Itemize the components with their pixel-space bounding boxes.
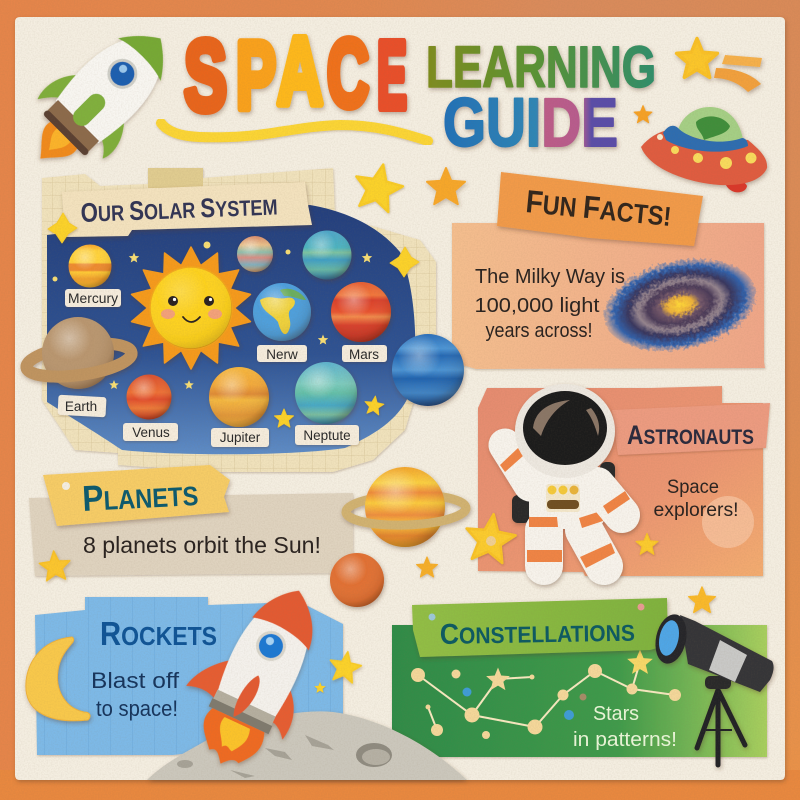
label: Jupiter: [211, 428, 269, 447]
heading: astronauts: ASTRONAUTS: [627, 420, 754, 450]
label: Earth: [58, 395, 106, 417]
planets text: 8 planets orbit the Sun!: [83, 532, 321, 558]
salmon card: [478, 386, 763, 576]
constellations text: [573, 703, 677, 751]
legs: [525, 530, 563, 566]
rockets text: Blast off: [91, 668, 180, 693]
star on astronaut card: [463, 511, 518, 564]
blue felt board: [47, 205, 415, 454]
blue card: [35, 597, 343, 755]
panel: our solar system: [24, 168, 436, 472]
icon: astronaut: [500, 384, 630, 568]
shooting star icon: [677, 38, 762, 92]
heading: our solar system: OUR SOLAR SYSTEM: [80, 190, 278, 228]
astronaut text: Space: [667, 477, 719, 498]
icon: red and white rocket: [163, 564, 344, 784]
label: Mars: [342, 345, 387, 362]
moon surface: [147, 711, 467, 780]
planet: Earth globe: [253, 283, 311, 341]
fact text: The Milky Way is: [475, 266, 625, 288]
icon: green rocket: [8, 6, 193, 191]
label: Nerw: Nerw: [266, 347, 298, 362]
panel: fun facts: [452, 172, 765, 369]
title: Space Learning Guide: E: [377, 22, 407, 129]
small star: [327, 649, 363, 684]
heading: fun facts: FUN FACTS!: [524, 183, 673, 233]
orange tab: [497, 172, 703, 246]
icon: flying saucer: [641, 107, 767, 192]
header banner: [62, 182, 312, 237]
fact text: [474, 266, 625, 342]
title word: SPACE: C: [327, 20, 369, 127]
left raised arm: [505, 445, 530, 485]
planet: orange: [330, 553, 384, 607]
small orange star: [634, 106, 652, 123]
panel: rockets: [26, 597, 363, 755]
heading: rockets: ROCKETS: [100, 615, 217, 652]
title word: SPACE: P: [236, 22, 276, 129]
decorative yellow stars around solar panel: [48, 160, 419, 427]
title word: SPACE: A: [277, 18, 323, 125]
right arm: [597, 485, 622, 515]
title word: SPACE: [184, 18, 407, 132]
astronaut text: explorers!: [654, 500, 738, 521]
title word: SPACE: S: [184, 20, 227, 132]
astronaut tab: [612, 403, 770, 455]
small star: [689, 587, 715, 612]
title word: LEARNING: LEARNING: [426, 35, 656, 100]
galaxy illustration: [596, 246, 764, 364]
planet: Mercury: [68, 244, 112, 288]
icon: smiling sun: [129, 247, 253, 369]
yellow tab: [43, 465, 230, 526]
green card: [392, 625, 767, 757]
label: Earth: Earth: [65, 399, 97, 414]
label: Mars: Mars: [349, 347, 379, 362]
peach card: [452, 223, 765, 369]
fact text: years across!: [486, 320, 592, 342]
big blue planet: [392, 334, 464, 406]
graph paper backing: [42, 168, 436, 472]
green tab: [412, 598, 668, 657]
title word: GUIDE: GUIDE: [443, 84, 618, 161]
constellations text: in patterns!: [573, 729, 677, 751]
icon: telescope: [651, 611, 774, 765]
constellations text: Stars: [593, 703, 639, 725]
panel: constellations: [392, 598, 767, 757]
label: Nerw: [257, 345, 307, 362]
constellation chart: [411, 650, 681, 739]
small star: [38, 550, 71, 581]
rockets text: to space!: [96, 696, 178, 721]
heading: constellations: CONSTELLATIONS: [440, 616, 635, 651]
planet: Mars: [331, 282, 391, 342]
chest panel: [546, 484, 580, 512]
small star: [314, 682, 326, 693]
label: Mercury: Mercury: [68, 291, 118, 306]
label: Neptute: Neptute: [303, 428, 351, 443]
yellow swoosh underline: [161, 123, 428, 141]
planet: brown ringed: [24, 317, 134, 389]
label: Jupiter: Jupiter: [220, 430, 261, 445]
orange star: [427, 168, 465, 204]
tan strip card: [29, 493, 353, 576]
small star: [636, 534, 658, 554]
heading: planets: PLANETS: [81, 472, 199, 519]
astronaut text: [654, 477, 738, 521]
panel: planets: [29, 465, 353, 581]
label: Venus: Venus: [132, 425, 170, 440]
torso: [529, 467, 605, 529]
icon: crescent moon: [26, 637, 90, 721]
rockets text: [91, 668, 180, 721]
planet labels: [58, 289, 387, 447]
planet: teal striped: [302, 230, 352, 280]
label: Venus: [123, 423, 178, 441]
panel: astronauts: [463, 384, 770, 576]
planet: Jupiter: [209, 367, 269, 427]
planet: pastel striped: [237, 236, 273, 272]
planet: ringed yellow: [346, 467, 466, 547]
felt dots and stars: [52, 242, 372, 389]
fact text: 100,000 light: [474, 295, 600, 317]
helmet: [515, 384, 615, 478]
label: Neptute: [295, 425, 359, 445]
planet: Venus: [126, 374, 172, 420]
title: Space Learning Guide: [184, 18, 656, 161]
planet: Neptune: [295, 362, 357, 424]
small star: [417, 557, 437, 577]
